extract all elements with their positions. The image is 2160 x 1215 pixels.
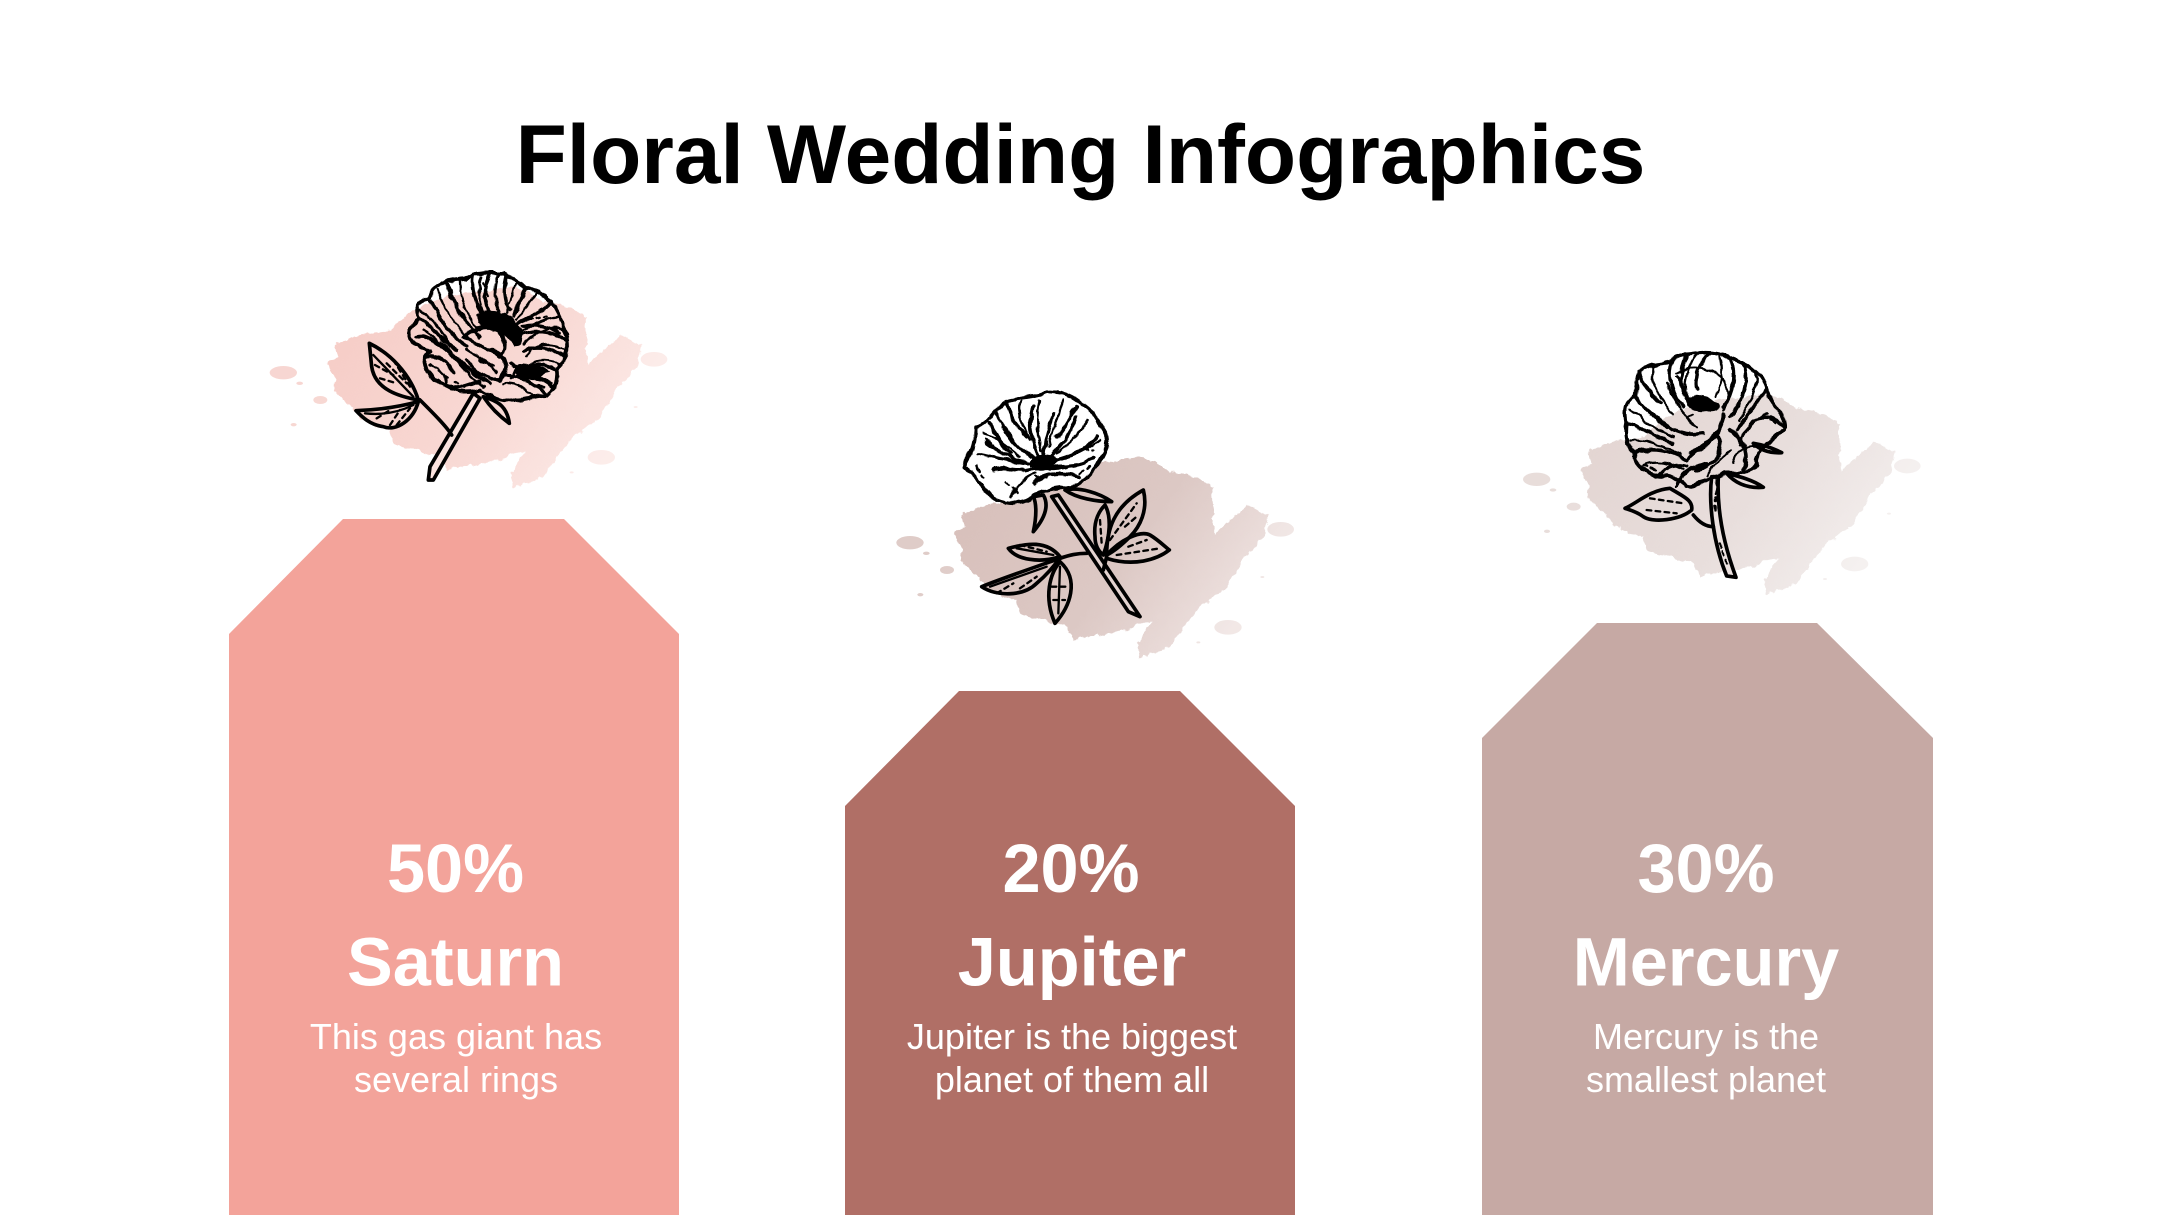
watercolor wash <box>896 457 1294 658</box>
Mercury description: Mercury is the <box>1593 1016 1819 1057</box>
Saturn description: This gas giant has <box>310 1016 602 1057</box>
icon: mauve watercolor carnation <box>896 392 1294 658</box>
carnation line drawing <box>963 392 1169 623</box>
panel: Saturn <box>229 519 679 1215</box>
Jupiter description: Jupiter is the biggest <box>907 1016 1237 1057</box>
title: Floral Wedding Infographics <box>516 107 1645 201</box>
Saturn name: Saturn <box>347 924 564 1000</box>
Jupiter description: planet of them all <box>935 1059 1209 1100</box>
icon: grey-pink watercolor peony <box>1523 353 1921 595</box>
panel: Mercury <box>1482 623 1933 1215</box>
Mercury description: smallest planet <box>1586 1059 1826 1100</box>
panel: Jupiter <box>845 691 1295 1215</box>
Jupiter percentage: 20% <box>1002 830 1140 907</box>
Saturn percentage: 50% <box>387 830 524 907</box>
icon: pink watercolor peony <box>270 273 667 488</box>
peony line drawing <box>356 273 567 480</box>
Jupiter name: Jupiter <box>958 924 1186 1000</box>
watercolor wash <box>1523 393 1921 595</box>
peony line drawing <box>1625 353 1785 577</box>
Mercury name: Mercury <box>1573 924 1839 1000</box>
watercolor wash <box>270 287 667 488</box>
Mercury percentage: 30% <box>1637 830 1775 907</box>
Saturn description: several rings <box>354 1059 558 1100</box>
